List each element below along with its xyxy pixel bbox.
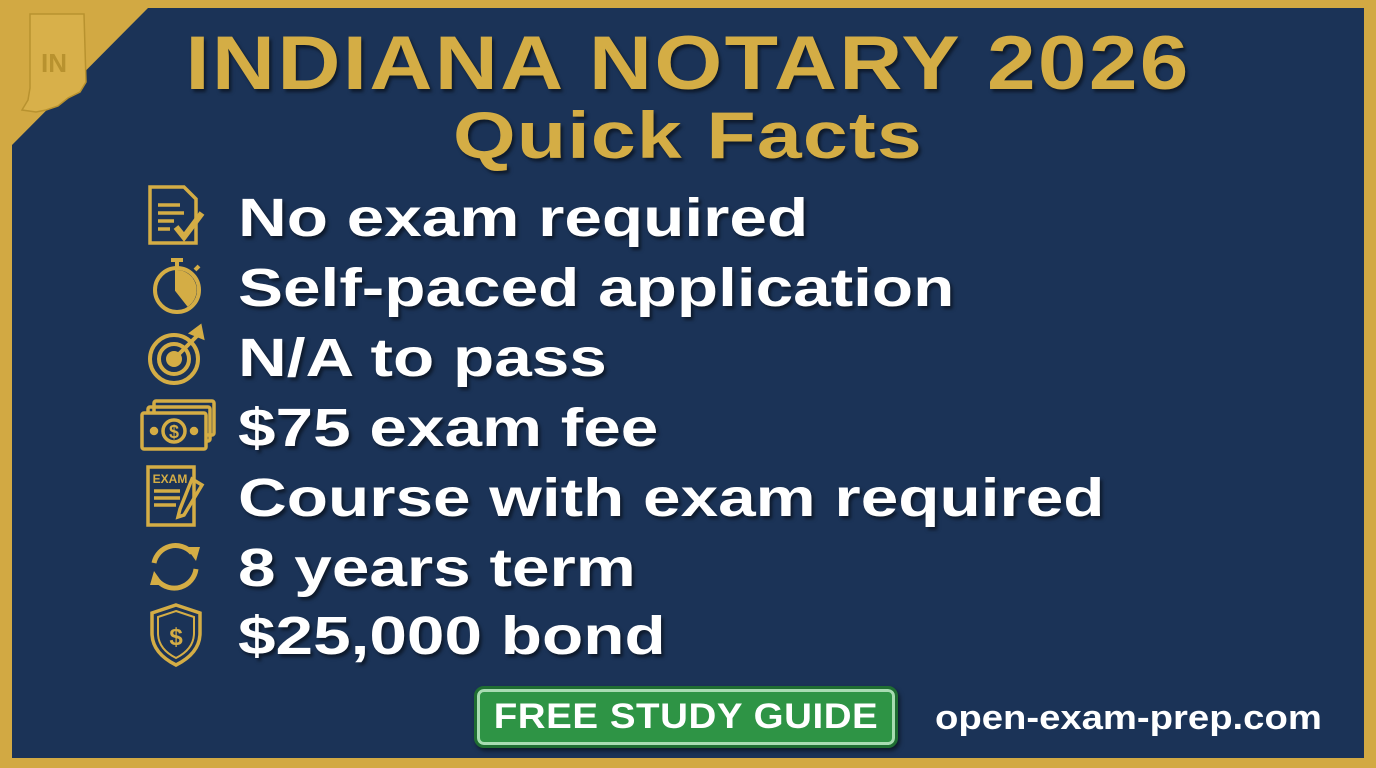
fact: self-paced: Self-paced application (238, 258, 954, 318)
button: free study guide: FREE STUDY GUIDE (494, 697, 878, 736)
icon: Indiana state (21, 13, 87, 113)
fact: pass: N/A to pass (238, 328, 607, 388)
title: INDIANA NOTARY 2026 (185, 21, 1191, 106)
fact: term: 8 years term (238, 538, 636, 598)
url: open-exam-prep.com (935, 699, 1322, 737)
fact: course: EXAM (153, 472, 187, 486)
fact: course: Course with exam required (238, 468, 1105, 528)
fact: no exam: No exam required (238, 188, 808, 248)
fact: bond: $25,000 bond (238, 606, 666, 666)
icon: Indiana state: IN (41, 48, 67, 78)
button: free study guide (474, 686, 898, 748)
subtitle: Quick Facts (453, 98, 923, 172)
fact: fee: $ (169, 422, 179, 442)
fact: fee: $75 exam fee (238, 398, 658, 458)
fact: bond: $ (169, 624, 183, 651)
fact list (140, 185, 1105, 667)
